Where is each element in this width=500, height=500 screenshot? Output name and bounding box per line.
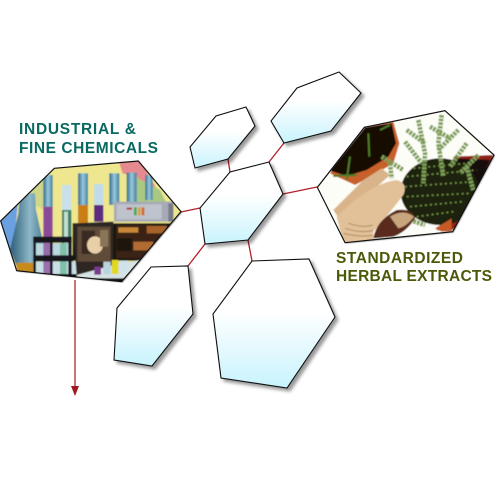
hexagon: top right empty: [271, 72, 361, 143]
photo hexagon: industrial and fine chemicals: [0, 157, 187, 287]
arrow: downward from chemicals hexagon: [71, 280, 79, 396]
moss speckles: [405, 163, 477, 217]
heading: industrial and fine chemicals: INDUSTRIAL &: [19, 121, 136, 138]
hexagon: lower left empty: [114, 266, 193, 366]
photo hexagon: standardized herbal extracts: [310, 107, 497, 247]
connector lines: [181, 143, 317, 266]
heading line 2: herbal extracts: HERBAL EXTRACTS: [336, 268, 492, 285]
hexagon: center empty: [200, 162, 283, 244]
hexagon: top small empty: [190, 107, 255, 168]
heading line 2: fine chemicals: FINE CHEMICALS: [19, 140, 158, 157]
hexagon: bottom large empty: [213, 259, 335, 388]
feathery sprigs: [382, 115, 478, 225]
heading: standardized: STANDARDIZED: [336, 250, 463, 267]
hexagon network infographic: [0, 71, 496, 396]
